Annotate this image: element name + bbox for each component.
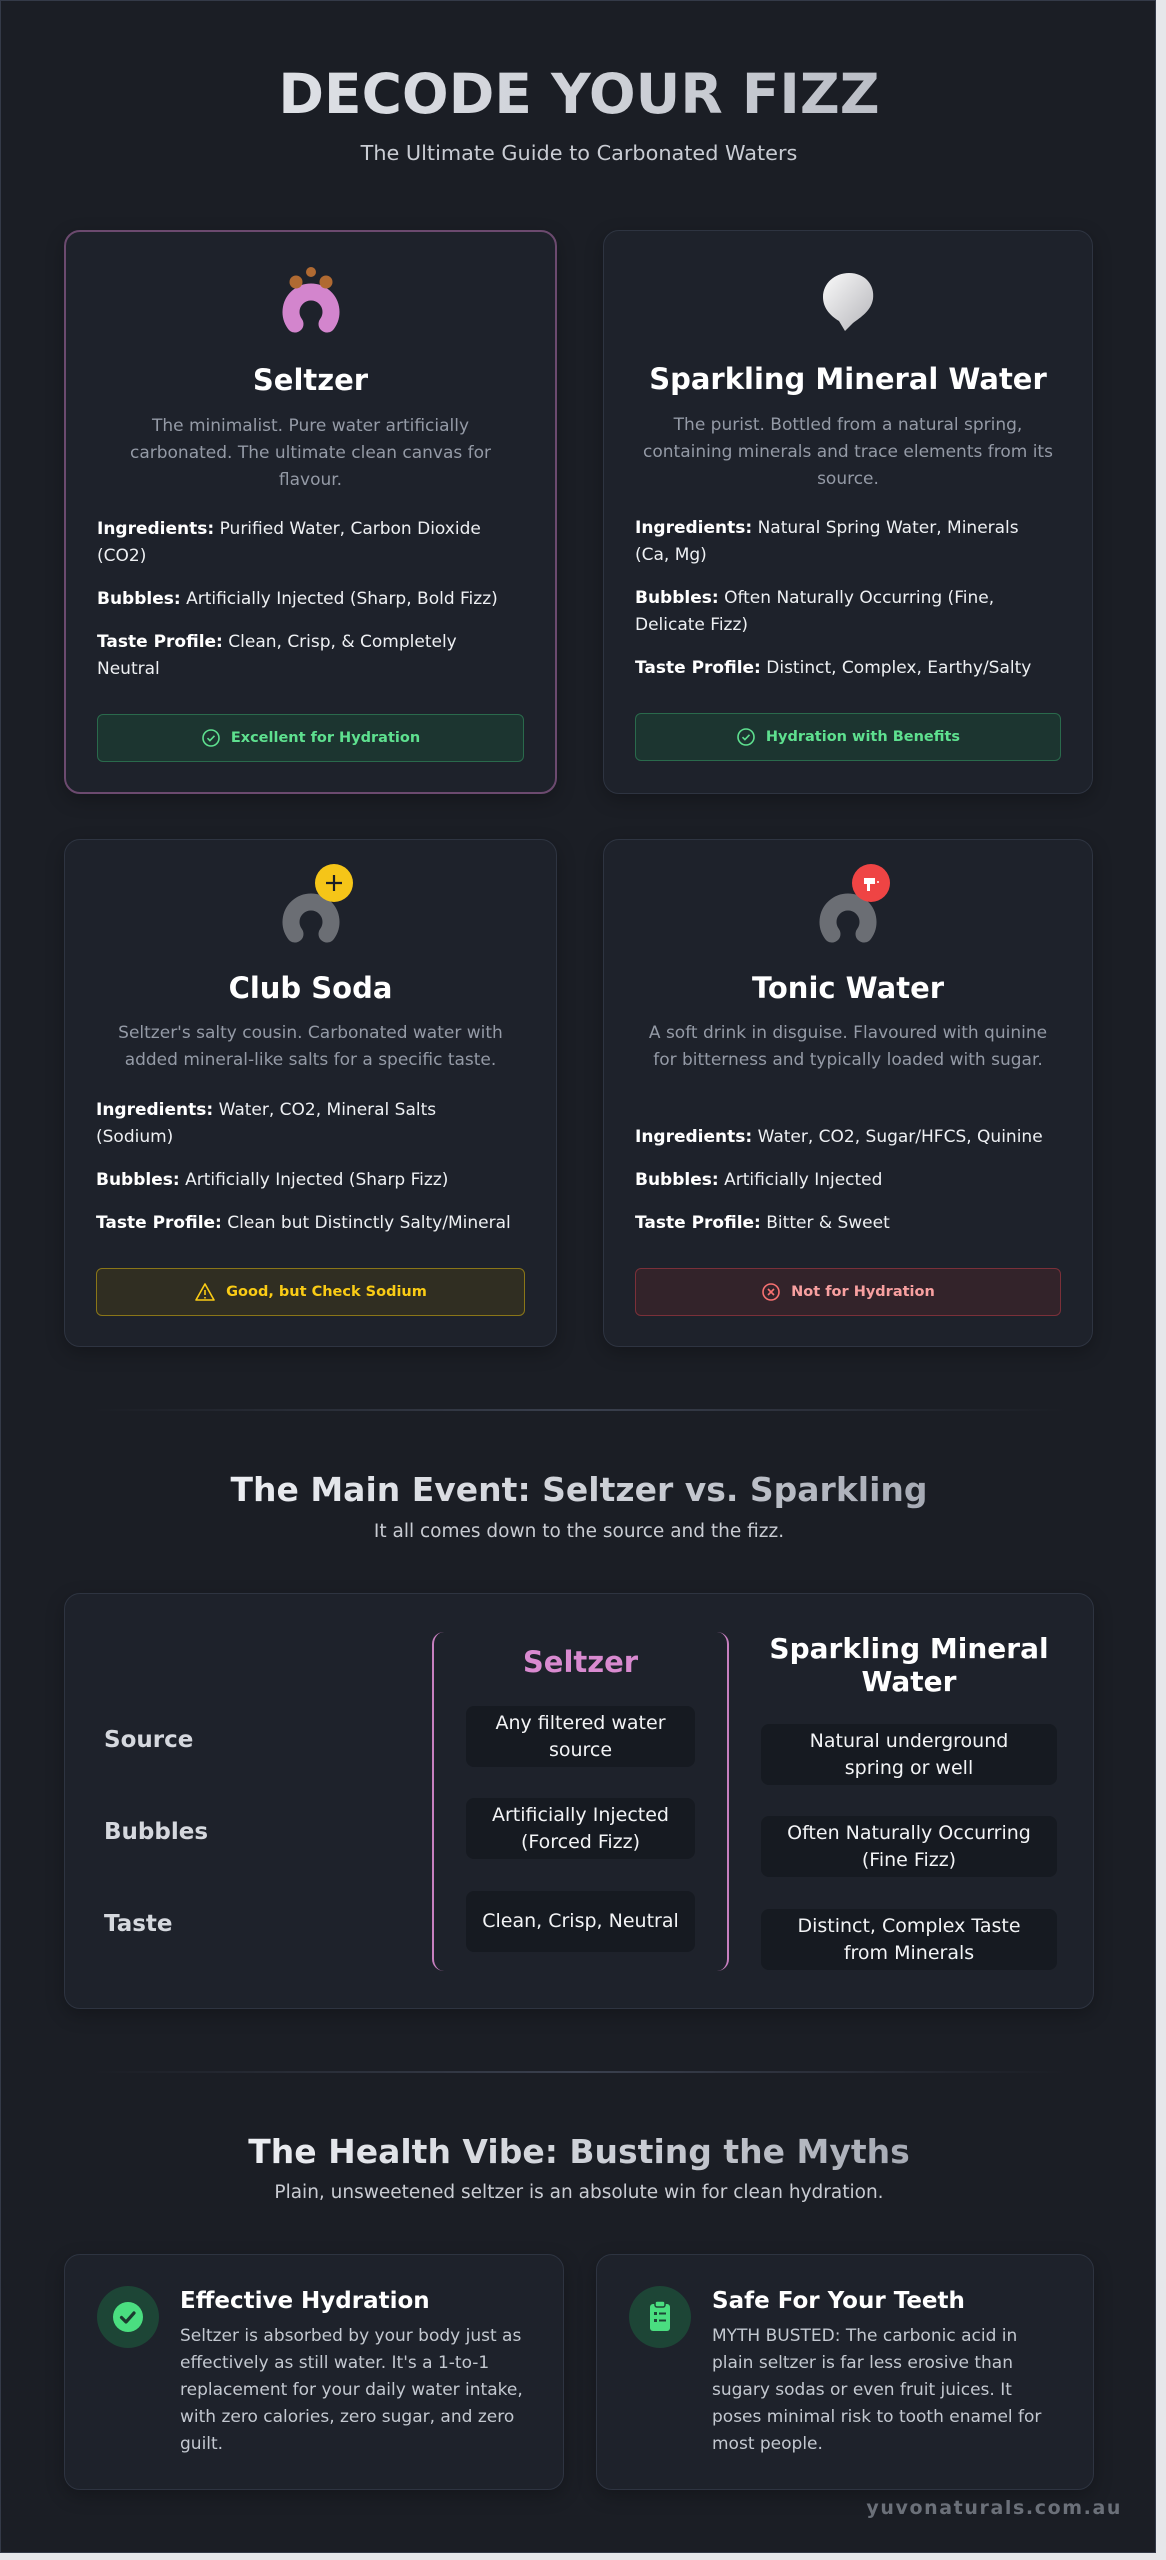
cell: seltzer taste: Clean, Crisp, Neutral xyxy=(482,1910,679,1932)
details xyxy=(96,1100,511,1233)
heading: Sparkling Mineral Water xyxy=(649,362,1047,396)
panel: effective hydration xyxy=(64,2254,564,2490)
icon: clipboard xyxy=(629,2286,691,2348)
details: Ingredients: Purified Water, Carbon Dioxide xyxy=(97,519,481,539)
subtitle: The Ultimate Guide to Carbonated Waters xyxy=(361,141,797,165)
panel: tonic water xyxy=(603,839,1093,1347)
cell: sparkling taste: from Minerals xyxy=(844,1942,974,1964)
icon: seltzer bubbles xyxy=(282,267,340,332)
badge: excellent: Excellent for Hydration xyxy=(231,730,420,746)
details: Taste Profile: Bitter & Sweet xyxy=(635,1213,890,1233)
details xyxy=(635,518,1031,678)
body text: guilt. xyxy=(180,2434,223,2454)
cell: sparkling source xyxy=(761,1724,1057,1785)
heading: main event: The Main Event: Seltzer vs. Sparkling xyxy=(230,1470,928,1509)
description: source. xyxy=(817,469,879,489)
description xyxy=(118,1023,503,1070)
body text: replacement for your daily water intake, xyxy=(180,2380,523,2400)
panel: seltzer xyxy=(64,230,557,794)
description xyxy=(130,416,491,490)
details: Delicate Fizz) xyxy=(635,615,748,635)
body text: Seltzer is absorbed by your body just as xyxy=(180,2326,521,2346)
panel: sparkling mineral water xyxy=(603,230,1093,794)
cell: seltzer bubbles: (Forced Fizz) xyxy=(521,1830,640,1852)
body text: most people. xyxy=(712,2434,823,2454)
description: added mineral-like salts for a specific taste. xyxy=(125,1050,496,1070)
column header: seltzer: Seltzer xyxy=(523,1645,638,1679)
description: The minimalist. Pure water artificially xyxy=(152,416,469,436)
cell: seltzer source xyxy=(466,1706,695,1767)
cell: seltzer bubbles xyxy=(466,1798,695,1859)
details xyxy=(635,1127,1043,1233)
heading: Effective Hydration xyxy=(180,2288,430,2314)
title xyxy=(1,59,1157,129)
details: Ingredients: Water, CO2, Mineral Salts xyxy=(96,1100,436,1120)
heading: Club Soda xyxy=(229,971,392,1005)
details: Taste Profile: Distinct, Complex, Earthy/Salty xyxy=(635,658,1031,678)
subheading: main event: It all comes down to the source and the fizz. xyxy=(374,1521,784,1542)
description: A soft drink in disguise. Flavoured with quinine xyxy=(649,1023,1047,1043)
details: Bubbles: Artificially Injected xyxy=(635,1170,882,1190)
cell: sparkling source: spring or well xyxy=(845,1756,973,1778)
body text xyxy=(712,2326,1042,2454)
cell: sparkling bubbles xyxy=(761,1816,1057,1877)
panel: club soda xyxy=(64,839,557,1347)
cell: sparkling taste xyxy=(761,1909,1057,1970)
body text: MYTH BUSTED: The carbonic acid in xyxy=(712,2326,1017,2346)
description: for bitterness and typically loaded with sugar. xyxy=(653,1050,1043,1070)
details: Taste Profile: Clean but Distinctly Salty/Mineral xyxy=(96,1213,511,1233)
icon: tonic xyxy=(820,864,890,942)
description: The purist. Bottled from a natural spring, xyxy=(674,415,1022,435)
details xyxy=(97,519,498,679)
cell: sparkling bubbles: (Fine Fizz) xyxy=(862,1848,956,1870)
heading: Safe For Your Teeth xyxy=(712,2288,965,2314)
details: Ingredients: Water, CO2, Sugar/HFCS, Quinine xyxy=(635,1127,1043,1147)
cell: seltzer bubbles: Artificially Injected xyxy=(492,1804,669,1826)
cell: seltzer source: Any filtered water xyxy=(495,1712,666,1734)
watermark: yuvonaturals.com.au xyxy=(866,2497,1122,2519)
description xyxy=(649,1023,1047,1070)
body text: sugary sodas or even fruit juices. It xyxy=(712,2380,1012,2400)
row label: source: Source xyxy=(104,1727,193,1753)
subheading: health vibe: Plain, unsweetened seltzer is an absolute win for clean hydration. xyxy=(274,2182,884,2203)
body text: plain seltzer is far less erosive than xyxy=(712,2353,1013,2373)
column: seltzer xyxy=(432,1632,729,1971)
details: Bubbles: Artificially Injected (Sharp, Bold Fizz) xyxy=(97,589,498,609)
badge: check sodium: Good, but Check Sodium xyxy=(226,1284,427,1300)
details: (CO2) xyxy=(97,546,146,566)
icon: check xyxy=(97,2286,159,2348)
cell: sparkling bubbles: Often Naturally Occurring xyxy=(787,1822,1031,1844)
cell: sparkling source: Natural underground xyxy=(810,1730,1008,1752)
details: Ingredients: Natural Spring Water, Minerals xyxy=(635,518,1019,538)
heading: Seltzer xyxy=(253,363,368,397)
icon: drop xyxy=(823,273,874,331)
body text: with zero calories, zero sugar, and zero xyxy=(180,2407,514,2427)
details: Taste Profile: Clean, Crisp, & Completely xyxy=(97,632,457,652)
description: carbonated. The ultimate clean canvas for xyxy=(130,443,491,463)
cell: seltzer source: source xyxy=(549,1738,612,1760)
column header: sparkling: Sparkling Mineral Water xyxy=(769,1632,1049,1698)
body text: effectively as still water. It's a 1-to-1 xyxy=(180,2353,489,2373)
description: containing minerals and trace elements from its xyxy=(643,442,1053,462)
panel: comparison table xyxy=(64,1593,1094,2009)
description xyxy=(643,415,1053,489)
description: flavour. xyxy=(279,470,342,490)
badge: not for hydration xyxy=(635,1268,1061,1316)
details: Bubbles: Artificially Injected (Sharp Fizz) xyxy=(96,1170,448,1190)
title: DECODE YOUR FIZZ xyxy=(278,62,880,126)
details: (Ca, Mg) xyxy=(635,545,707,565)
details: (Sodium) xyxy=(96,1127,173,1147)
details: Bubbles: Often Naturally Occurring (Fine, xyxy=(635,588,994,608)
panel: safe for teeth xyxy=(596,2254,1094,2490)
cell: sparkling taste: Distinct, Complex Taste xyxy=(797,1914,1021,1936)
row label: taste: Taste xyxy=(104,1911,173,1937)
body text: poses minimal risk to tooth enamel for xyxy=(712,2407,1041,2427)
badge: check sodium xyxy=(96,1268,525,1316)
badge: benefits: Hydration with Benefits xyxy=(766,729,960,745)
badge: benefits xyxy=(635,713,1061,761)
description: Seltzer's salty cousin. Carbonated water with xyxy=(118,1023,503,1043)
badge: not for hydration: Not for Hydration xyxy=(791,1284,935,1300)
details: Neutral xyxy=(97,659,160,679)
heading: Tonic Water xyxy=(752,971,944,1005)
icon: club soda xyxy=(282,864,353,942)
heading: health vibe: The Health Vibe: Busting the Myths xyxy=(248,2132,910,2171)
body text xyxy=(180,2326,523,2454)
row label: bubbles: Bubbles xyxy=(104,1819,208,1845)
badge: excellent xyxy=(97,714,524,762)
cell: seltzer taste xyxy=(466,1891,695,1952)
